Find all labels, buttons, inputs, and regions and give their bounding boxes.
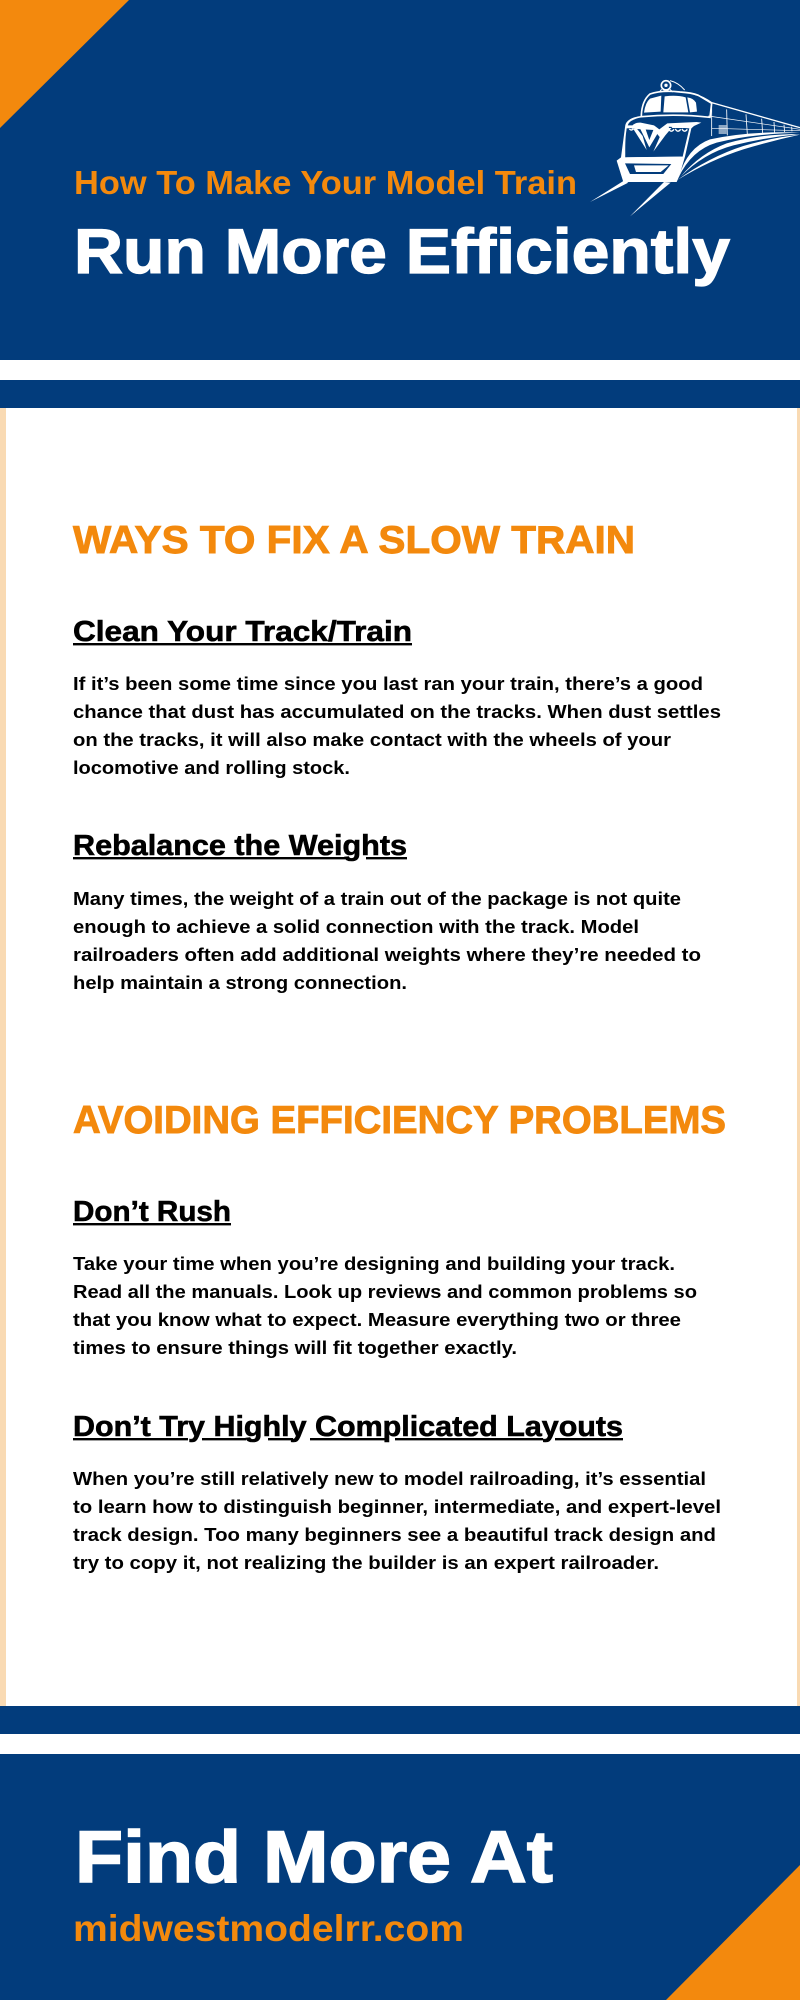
heading: Avoiding efficiency problems: AVOIDING EFFICIENCY PROBLEMS bbox=[73, 1099, 726, 1142]
navy band top bbox=[0, 380, 800, 408]
footer heading: Find More At bbox=[75, 1817, 553, 1898]
underline bbox=[73, 1438, 623, 1440]
title line: Run More Efficiently: Run More Efficiently bbox=[74, 217, 730, 287]
windows bbox=[644, 96, 697, 113]
body text: on the tracks, it will also make contact with the wheels of your bbox=[73, 729, 671, 750]
body text bbox=[73, 1468, 721, 1573]
section: don't try complicated layouts bbox=[73, 1411, 721, 1573]
body text bbox=[73, 888, 701, 993]
body text: enough to achieve a solid connection with the track. Model bbox=[73, 916, 639, 937]
heading: Ways to fix a slow train: WAYS TO FIX A SLOW TRAIN bbox=[73, 519, 635, 562]
body text: locomotive and rolling stock. bbox=[73, 757, 350, 778]
website: midwestmodelrr.com bbox=[73, 1908, 464, 1949]
body text: to learn how to distinguish beginner, intermediate, and expert-level bbox=[73, 1496, 721, 1517]
icon: locomotive bbox=[590, 81, 800, 216]
body text: If it’s been some time since you last ran your train, there’s a good bbox=[73, 673, 703, 694]
panel: header bbox=[0, 0, 800, 360]
underline bbox=[73, 857, 407, 859]
rails bbox=[590, 181, 628, 202]
section: rebalance weights bbox=[73, 830, 701, 993]
underline bbox=[73, 643, 412, 645]
subheading: Rebalance the Weights bbox=[73, 830, 407, 862]
orange corner triangle bbox=[666, 1865, 800, 2000]
orange corner triangle bbox=[0, 0, 129, 128]
subheading: Clean Your Track/Train bbox=[73, 616, 412, 648]
body text: railroaders often add additional weights where they’re needed to bbox=[73, 944, 701, 965]
panel: content bbox=[0, 408, 800, 1706]
coach lines bbox=[695, 94, 800, 136]
body text: Many times, the weight of a train out of the package is not quite bbox=[73, 888, 681, 909]
body text: When you’re still relatively new to model railroading, it’s essential bbox=[73, 1468, 706, 1489]
subheading: Don’t Rush bbox=[73, 1196, 231, 1228]
section: clean your track bbox=[73, 616, 721, 778]
panel: footer bbox=[0, 1754, 800, 2000]
nose body bbox=[617, 116, 701, 182]
side stripe left bbox=[0, 408, 6, 1706]
body text: Take your time when you’re designing and building your track. bbox=[73, 1253, 675, 1274]
body text: times to ensure things will fit together exactly. bbox=[73, 1337, 517, 1358]
body text bbox=[73, 1253, 697, 1358]
side stripe right bbox=[797, 408, 800, 1706]
swooshes bbox=[679, 132, 800, 177]
body text: chance that dust has accumulated on the tracks. When dust settles bbox=[73, 701, 721, 722]
body text: track design. Too many beginners see a beautiful track design and bbox=[73, 1524, 716, 1545]
cab outline bbox=[641, 91, 712, 117]
underline bbox=[73, 1223, 231, 1225]
section: don't rush bbox=[73, 1196, 697, 1358]
body text: try to copy it, not realizing the builder is an expert railroader. bbox=[73, 1552, 659, 1573]
body text: that you know what to expect. Measure everything two or three bbox=[73, 1309, 681, 1330]
grille V bbox=[626, 125, 693, 152]
body text: Read all the manuals. Look up reviews and common problems so bbox=[73, 1281, 697, 1302]
headlamps bbox=[629, 129, 687, 131]
title line: How To Make Your Model Train: How To Make Your Model Train bbox=[74, 164, 577, 201]
body text bbox=[73, 673, 721, 778]
navy band bottom bbox=[0, 1706, 800, 1734]
pantograph bbox=[661, 81, 671, 90]
subheading: Don’t Try Highly Complicated Layouts bbox=[73, 1411, 623, 1443]
lower front panel bbox=[625, 163, 671, 174]
body text: help maintain a strong connection. bbox=[73, 972, 407, 993]
